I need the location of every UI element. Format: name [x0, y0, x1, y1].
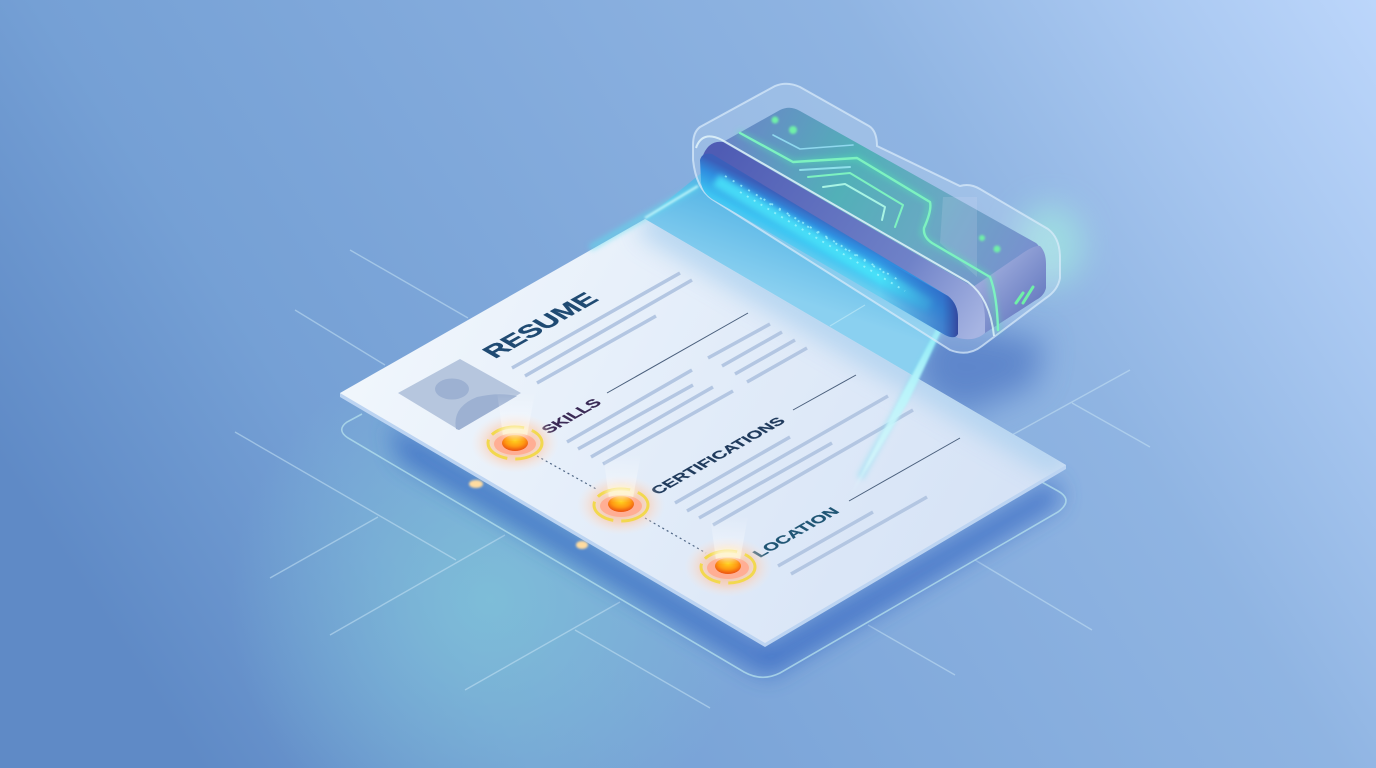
background grid lines — [235, 250, 1150, 708]
dotted connector between hotspots — [537, 456, 706, 553]
scanner right end — [960, 246, 1046, 339]
green circuit traces — [740, 133, 998, 330]
certifications label and text lines: CERTIFICATIONS — [647, 415, 790, 497]
scanner front lip — [702, 142, 985, 339]
green indicator lights — [772, 116, 1000, 252]
cyan scan beam between scanner and paper — [645, 170, 952, 378]
soft blue fade along the paper top edge — [645, 219, 1066, 465]
certifications label and text lines — [647, 375, 913, 525]
translucent casing panel — [940, 197, 977, 277]
scanner top face — [723, 108, 1039, 287]
green glow at scanner end — [1016, 205, 1084, 285]
bright beam strand crossing the paper — [848, 310, 951, 500]
casing rim highlight — [696, 136, 994, 336]
skills label and text lines: SKILLS — [538, 396, 606, 436]
slot cyan light — [716, 180, 930, 306]
icon: scanner device — [693, 84, 1084, 353]
skills label and text lines — [538, 313, 748, 464]
hotspot: skills — [471, 392, 559, 473]
shadow beneath the paper — [390, 320, 1060, 676]
location label and text lines — [749, 438, 960, 574]
summary text lines — [512, 273, 807, 383]
resume paper — [340, 219, 1066, 647]
hotspot: location — [684, 516, 772, 597]
slot dark right end — [880, 258, 958, 337]
location label and text lines: LOCATION — [749, 505, 843, 560]
scanner slot — [700, 154, 958, 337]
scanner glass casing — [693, 84, 1060, 353]
end vent marks — [1016, 287, 1033, 303]
small orange glints on the plate — [469, 480, 588, 549]
profile photo placeholder — [398, 359, 521, 430]
lower glass plate outline — [342, 414, 1066, 677]
bright glow along the paper's upper left edge — [590, 186, 698, 248]
heading: resume: RESUME — [476, 289, 605, 362]
slot sparkle dots — [725, 176, 905, 291]
hotspot: certifications — [577, 454, 665, 535]
